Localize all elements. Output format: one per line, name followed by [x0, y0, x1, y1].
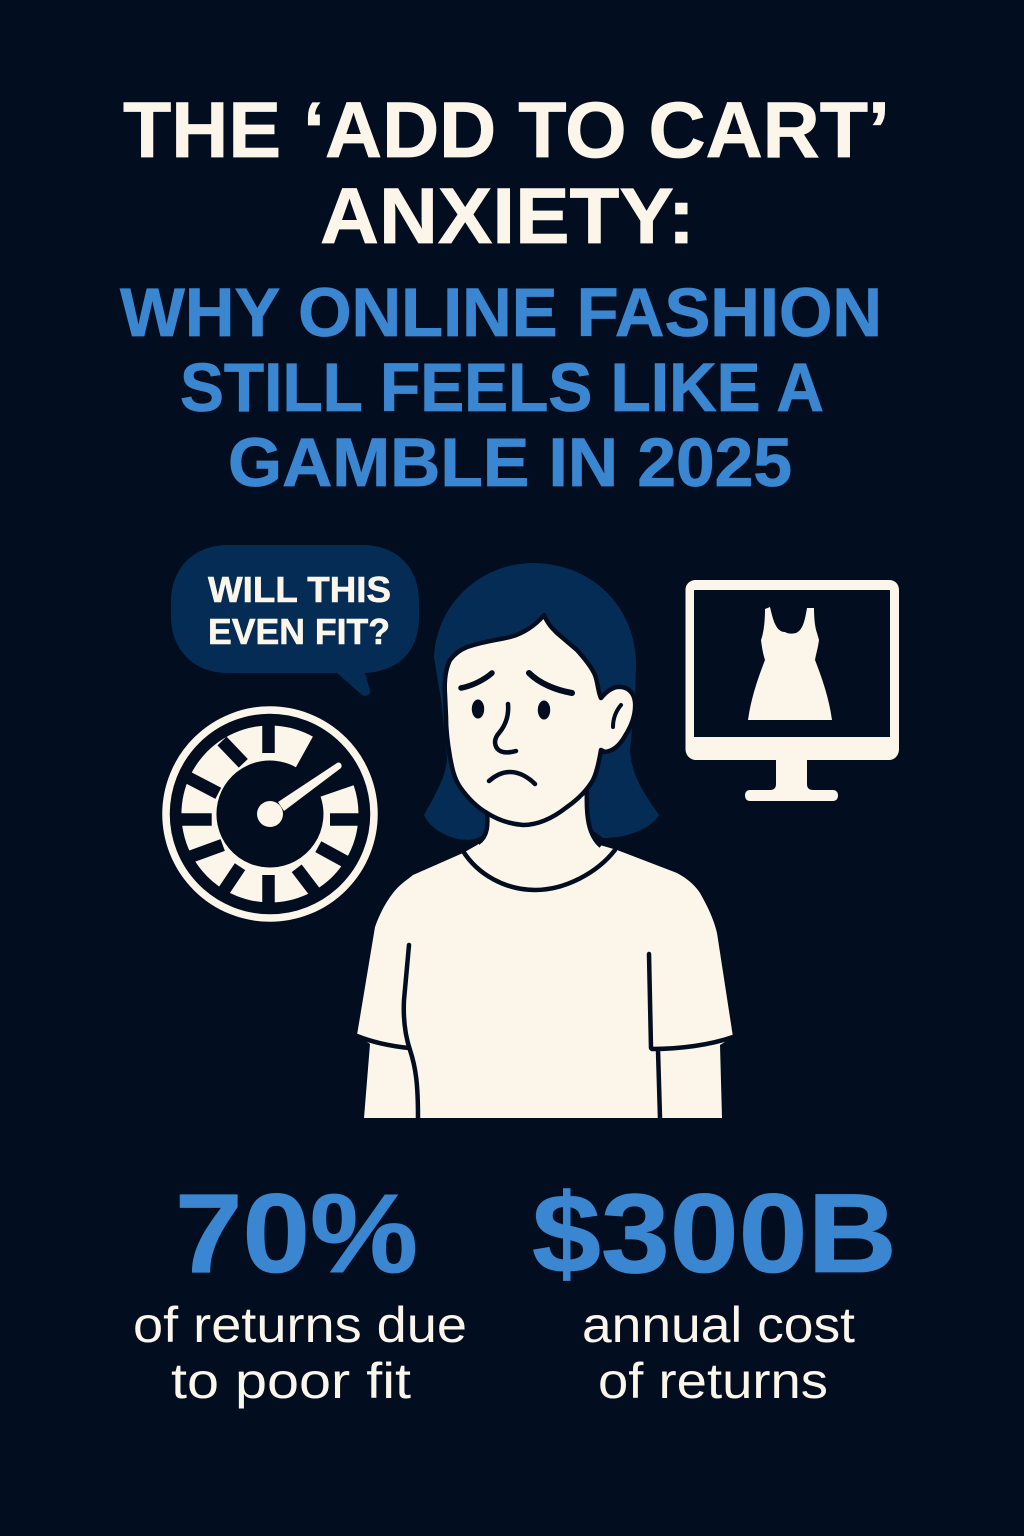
monitor body [686, 580, 899, 801]
face [445, 615, 635, 825]
title: blue subheading [120, 274, 882, 501]
stat label: of returns [598, 1353, 828, 1409]
title: white heading [123, 85, 890, 260]
dial needle [278, 762, 342, 811]
dial hub [257, 801, 283, 827]
stat: $300B cost [532, 1171, 897, 1409]
shirt lines [357, 850, 733, 1118]
stat label: annual cost [582, 1297, 855, 1353]
bubble text [208, 569, 391, 652]
speech bubble [171, 545, 419, 696]
character: worried woman [357, 563, 733, 1118]
bubble shape [171, 545, 419, 696]
title: blue subheading: WHY ONLINE FASHION [120, 274, 882, 351]
neck lines [478, 790, 601, 846]
hair [424, 563, 659, 840]
title: white heading: THE ‘ADD TO CART’ [123, 85, 890, 174]
stat label [582, 1297, 855, 1409]
facial features [461, 673, 621, 784]
bubble text: WILL THIS [208, 569, 391, 610]
stat value: $300B [532, 1171, 897, 1296]
title: blue subheading: GAMBLE IN 2025 [228, 424, 792, 501]
title [120, 85, 890, 501]
icon: roulette dial gauge [166, 710, 374, 918]
monitor screen [694, 590, 890, 737]
dress [748, 607, 832, 720]
title: white heading: ANXIETY: [320, 171, 695, 260]
shirt and neck [357, 795, 733, 1118]
title: blue subheading: STILL FEELS LIKE A [180, 349, 824, 426]
stat value: 70% [175, 1171, 418, 1296]
eyes [472, 700, 550, 720]
bubble text: EVEN FIT? [208, 611, 390, 652]
stat label [133, 1297, 467, 1409]
stat label: of returns due [133, 1297, 467, 1353]
icon: monitor with dress [686, 580, 899, 801]
stat label: to poor fit [171, 1353, 411, 1409]
stat: 70% of returns [133, 1171, 467, 1409]
